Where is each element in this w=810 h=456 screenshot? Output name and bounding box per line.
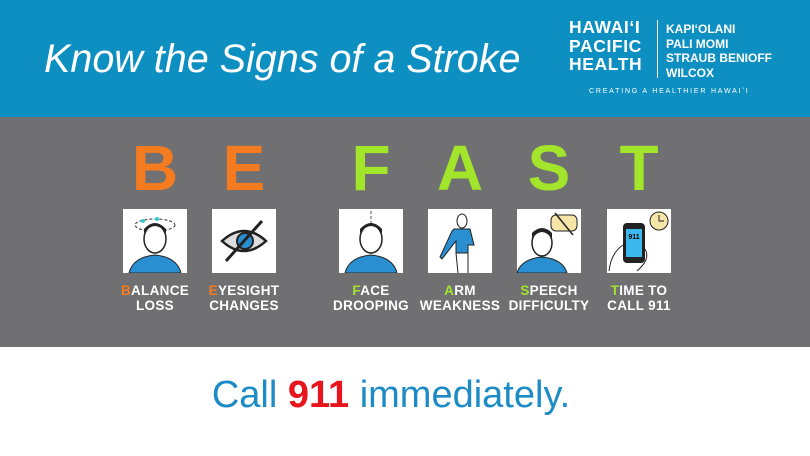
- letters: [132, 132, 659, 204]
- logo: HEALTH: [569, 54, 642, 74]
- text: F: [351, 132, 391, 204]
- logo: [569, 17, 772, 95]
- text: WEAKNESS: [420, 298, 500, 313]
- call to action: Call 911 immediately.: [212, 374, 570, 416]
- text: A: [437, 132, 483, 204]
- logo: HAWAIʻI: [569, 17, 640, 37]
- icon: time to call: 911: [628, 234, 640, 241]
- logo: STRAUB BENIOFF: [666, 51, 772, 65]
- text: DIFFICULTY: [509, 298, 589, 313]
- icon: balance loss: [123, 209, 187, 273]
- text: BALANCE: [121, 283, 189, 298]
- icon: eyesight: [212, 209, 276, 273]
- text: T: [619, 132, 659, 204]
- logo: KAPIʻOLANI: [666, 22, 735, 36]
- text: FACE: [352, 283, 390, 298]
- logo: WILCOX: [666, 66, 714, 80]
- icon: face drooping: [339, 209, 403, 273]
- labels: [121, 283, 671, 313]
- text: S: [528, 132, 570, 204]
- title: Know the Signs of a Stroke: [44, 37, 520, 81]
- logo: CREATING A HEALTHIER HAWAIʻI: [589, 88, 749, 95]
- text: LOSS: [136, 298, 174, 313]
- text: B: [132, 132, 178, 204]
- text: ARM: [444, 283, 476, 298]
- text: CALL 911: [607, 298, 671, 313]
- text: SPEECH: [520, 283, 578, 298]
- logo: PACIFIC: [569, 36, 642, 56]
- text: EYESIGHT: [209, 283, 279, 298]
- icon: time to call: [607, 209, 671, 273]
- icon: arm weakness: [428, 209, 492, 273]
- text: DROOPING: [333, 298, 409, 313]
- header banner: [0, 0, 810, 117]
- icon: speech difficulty: [517, 209, 581, 273]
- grey panel: BE FAST: [0, 117, 810, 347]
- text: CHANGES: [209, 298, 279, 313]
- text: E: [223, 132, 265, 204]
- logo: PALI MOMI: [666, 36, 728, 50]
- text: TIME TO: [611, 283, 667, 298]
